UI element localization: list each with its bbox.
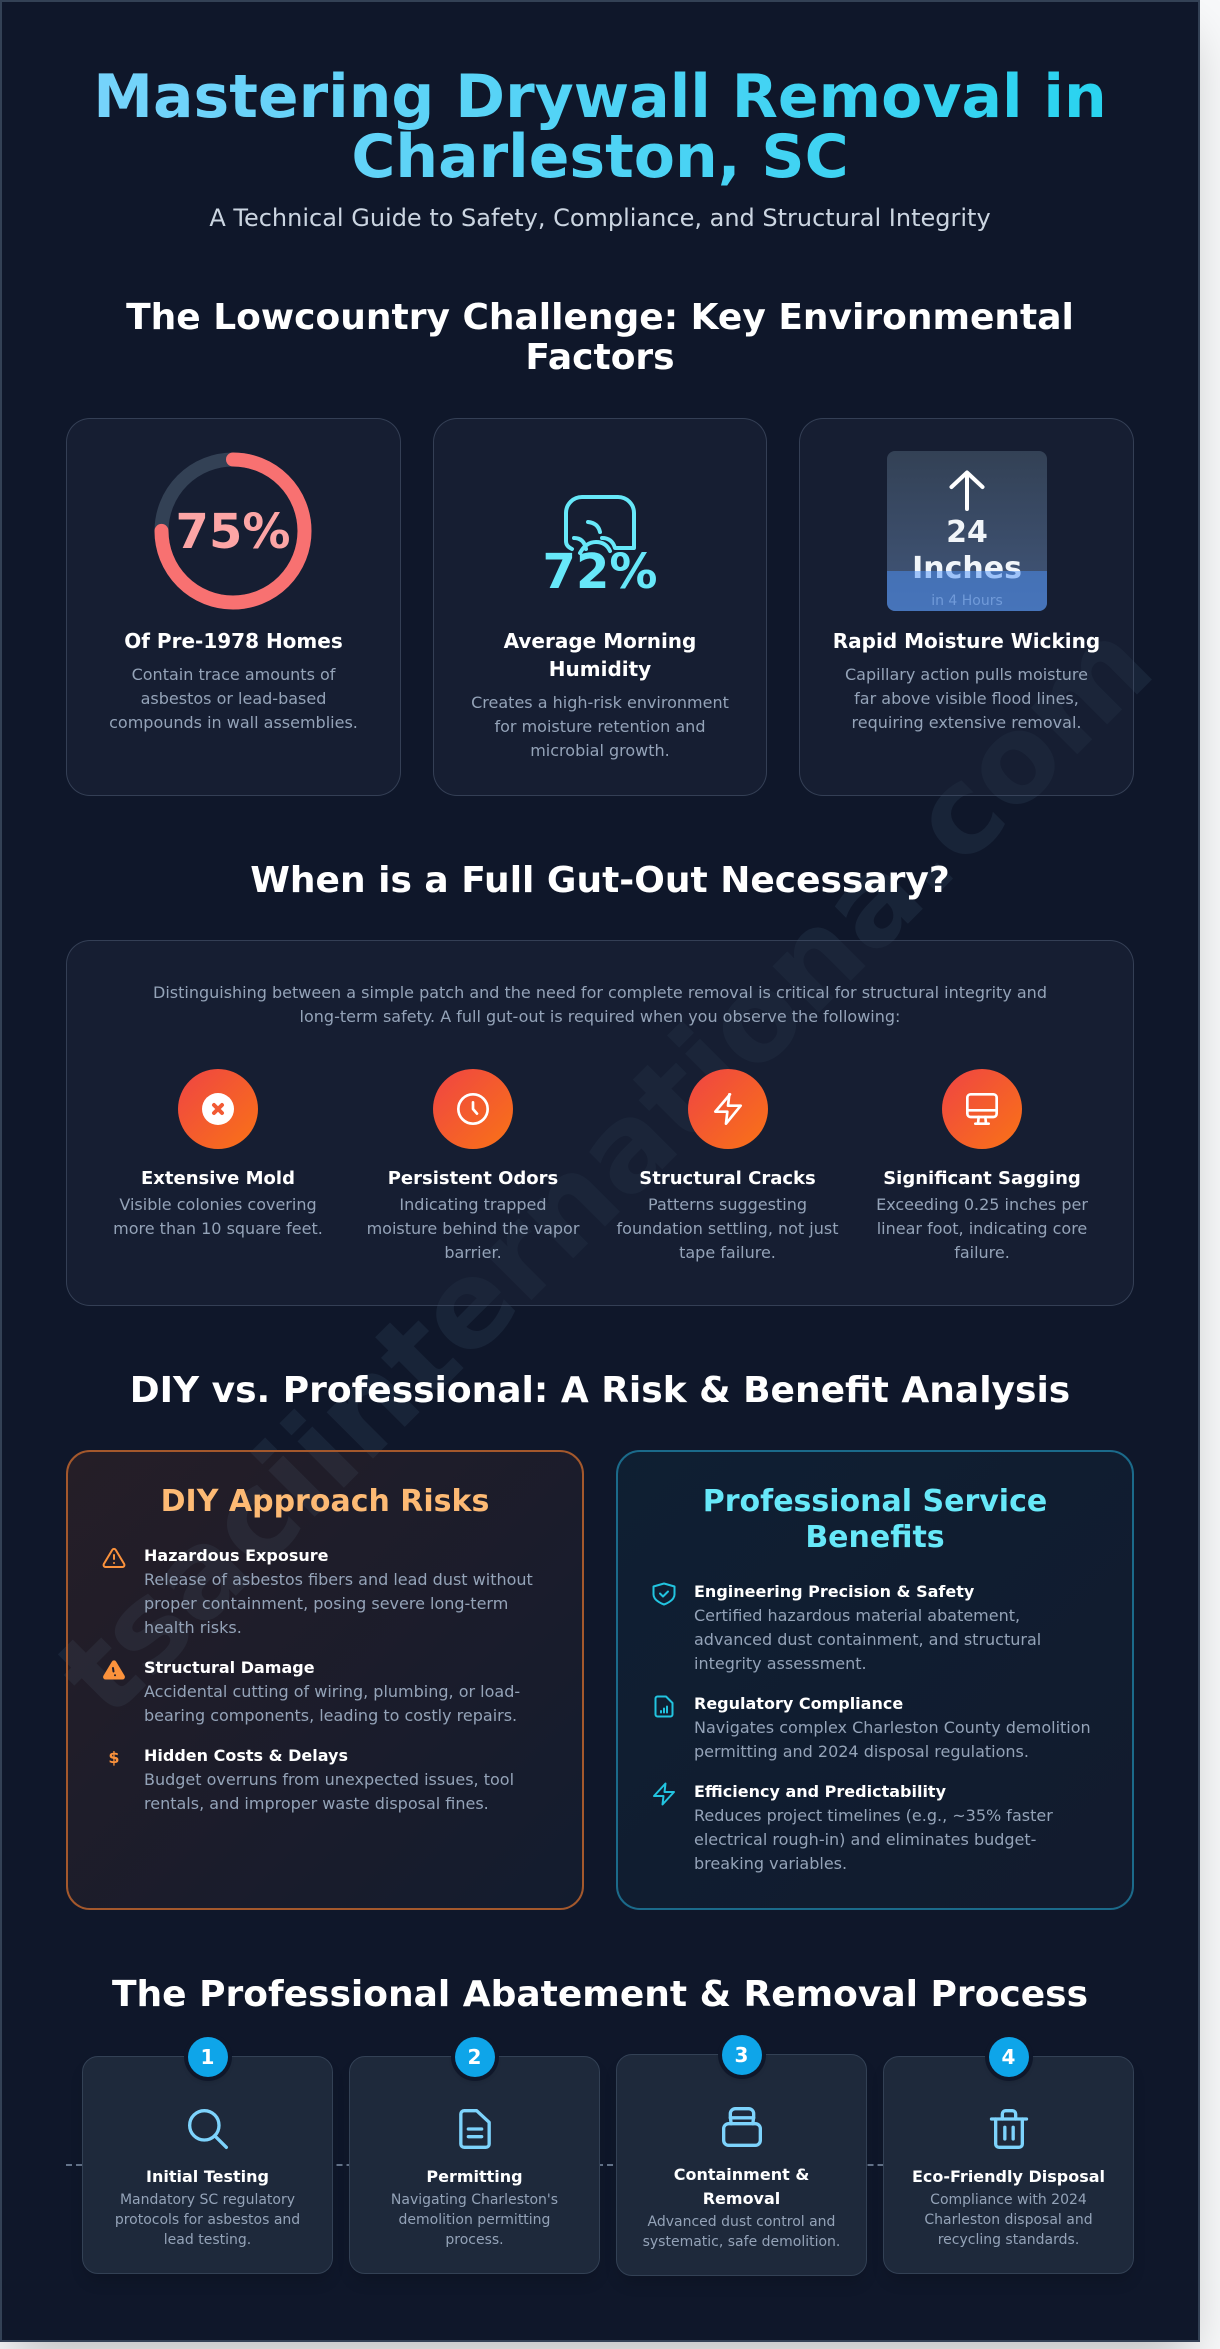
stat label: Humidity <box>549 657 651 681</box>
stat description: for moisture retention and <box>494 717 705 736</box>
step text <box>350 2190 599 2250</box>
title <box>0 67 1200 187</box>
step number: 3 <box>735 2043 748 2067</box>
sign text: Indicating trapped <box>399 1195 547 1214</box>
donut chart: 75% <box>154 452 312 610</box>
intro text: long-term safety. A full gut-out is required when you observe the following: <box>300 1007 900 1026</box>
stat description: Creates a high-risk environment <box>471 693 729 712</box>
icon: document chart <box>654 1696 674 1718</box>
subtitle: A Technical Guide to Safety, Compliance, and Structural Integrity <box>209 204 991 232</box>
sign text <box>616 1195 838 1262</box>
sign text <box>876 1195 1088 1262</box>
step number <box>722 2035 762 2075</box>
panel: gut-out signs <box>66 940 1134 1306</box>
benefit text: Reduces project timelines (e.g., ~35% faster <box>694 1806 1053 1824</box>
sign title: Persistent Odors <box>388 1168 558 1189</box>
sign title: Significant Sagging <box>883 1168 1081 1189</box>
risk text: bearing components, leading to costly repairs. <box>144 1706 517 1724</box>
sign text: moisture behind the vapor <box>367 1219 579 1238</box>
benefit: regulatory compliance <box>654 1694 1091 1760</box>
step text <box>617 2212 866 2252</box>
sign text: failure. <box>954 1243 1010 1262</box>
heading: lowcountry challenge <box>126 297 1074 378</box>
sign text <box>113 1195 323 1238</box>
sign text: linear foot, indicating core <box>877 1219 1087 1238</box>
sign text: more than 10 square feet. <box>113 1219 323 1238</box>
risk text: health risks. <box>144 1618 242 1636</box>
step text: Advanced dust control and <box>648 2214 835 2230</box>
panel: DIY risks <box>66 1450 584 1910</box>
watermark: tsaciinternationa.com <box>31 595 1179 1743</box>
risk: hidden costs <box>108 1746 514 1812</box>
icon: shield check <box>652 1582 676 1606</box>
stat label <box>504 629 696 681</box>
step text: recycling standards. <box>938 2232 1079 2248</box>
risk text: Budget overruns from unexpected issues, tool <box>144 1770 514 1788</box>
step title <box>617 2162 866 2210</box>
stat description <box>109 665 358 732</box>
stat label: Rapid Moisture Wicking <box>833 629 1100 653</box>
wicking gauge <box>887 451 1047 611</box>
risk text <box>144 1770 514 1812</box>
benefit title: Engineering Precision & Safety <box>694 1582 974 1600</box>
panel: professional benefits <box>616 1450 1134 1910</box>
benefit text: electrical rough-in) and eliminates budget- <box>694 1830 1036 1848</box>
stat label: Of Pre-1978 Homes <box>124 629 343 653</box>
step 4 <box>883 2056 1134 2274</box>
step 3 <box>616 2054 867 2276</box>
step title: Initial Testing <box>146 2166 269 2186</box>
sign text: tape failure. <box>679 1243 776 1262</box>
gauge value <box>912 515 1022 586</box>
panel heading: Professional Service <box>703 1484 1047 1519</box>
heading: abatement process: The Professional Abatement & Removal Process <box>112 1974 1088 2015</box>
stat label: Average Morning <box>504 629 696 653</box>
icon: dollar: $ <box>108 1748 120 1766</box>
sign text <box>367 1195 580 1262</box>
step title: Containment & <box>674 2164 809 2184</box>
risk text <box>144 1682 520 1724</box>
risk title: Hazardous Exposure <box>144 1546 328 1564</box>
sign text: Visible colonies covering <box>119 1195 317 1214</box>
stat description: Contain trace amounts of <box>132 665 335 684</box>
panel heading: DIY Approach Risks <box>161 1484 489 1519</box>
icon: monitor <box>942 1069 1022 1149</box>
gauge value: 24 <box>946 515 988 550</box>
risk text: Release of asbestos fibers and lead dust without <box>144 1570 533 1588</box>
connector: dashed timeline <box>66 2164 1134 2166</box>
icon: clock <box>433 1069 513 1149</box>
step number <box>988 2037 1028 2077</box>
risk: structural damage <box>103 1658 520 1724</box>
step number <box>188 2037 228 2077</box>
step text <box>115 2192 300 2248</box>
risk text: proper containment, posing severe long-term <box>144 1594 508 1612</box>
stat description <box>471 693 729 760</box>
benefit: efficiency <box>653 1782 1053 1872</box>
gauge caption: in 4 Hours <box>931 593 1003 609</box>
benefit text <box>694 1718 1091 1760</box>
step title: Removal <box>703 2188 780 2208</box>
stat description: requiring extensive removal. <box>852 713 1081 732</box>
icon: containment box <box>722 2107 762 2147</box>
benefit text: Certified hazardous material abatement, <box>694 1606 1020 1624</box>
gauge value: Inches <box>912 551 1022 586</box>
donut chart: 75%: 75% <box>176 504 290 560</box>
step number: 1 <box>201 2045 214 2069</box>
panel: stat 72 percent humidity <box>433 418 767 796</box>
step text: demolition permitting <box>399 2212 550 2228</box>
icon: search <box>188 2109 228 2150</box>
risk text: rentals, and improper waste disposal fines. <box>144 1794 489 1812</box>
step 2 <box>349 2056 600 2274</box>
icon: arrow up <box>949 470 985 511</box>
risk text: Accidental cutting of wiring, plumbing, or load- <box>144 1682 520 1700</box>
risk title: Hidden Costs & Delays <box>144 1746 348 1764</box>
stat description: far above visible flood lines, <box>854 689 1079 708</box>
panel heading <box>703 1484 1047 1555</box>
risk: hazardous exposure <box>102 1546 533 1636</box>
sign title: Extensive Mold <box>141 1168 295 1189</box>
step text: process. <box>445 2232 504 2248</box>
sign: significant sagging <box>876 1069 1088 1262</box>
benefit text: advanced dust containment, and structural <box>694 1630 1041 1648</box>
step number: 4 <box>1002 2045 1015 2069</box>
panel: stat 75 percent <box>66 418 401 796</box>
benefit text <box>694 1806 1053 1872</box>
heading: lowcountry challenge: Factors <box>525 337 675 378</box>
benefit text <box>694 1606 1041 1672</box>
benefit title: Efficiency and Predictability <box>694 1782 946 1800</box>
step number: 2 <box>468 2045 481 2069</box>
icon: warning filled <box>103 1660 125 1680</box>
water level <box>887 571 1047 611</box>
icon: humidity with 72% <box>543 495 657 600</box>
benefit: engineering precision <box>652 1582 1041 1672</box>
panel heading: Benefits <box>805 1520 945 1555</box>
benefit text: integrity assessment. <box>694 1654 867 1672</box>
risk text <box>144 1570 533 1636</box>
stat description: microbial growth. <box>530 741 670 760</box>
icon: bolt <box>688 1069 768 1149</box>
sign text: foundation settling, not just <box>617 1219 838 1238</box>
step text: Navigating Charleston's <box>391 2192 558 2208</box>
sign title: Structural Cracks <box>639 1168 816 1189</box>
step text: systematic, safe demolition. <box>643 2234 840 2250</box>
icon: warning outline <box>102 1548 126 1568</box>
title: Mastering Drywall Removal in <box>93 62 1107 132</box>
icon: document <box>459 2109 491 2149</box>
benefit text: Navigates complex Charleston County demolition <box>694 1718 1091 1736</box>
step title: Permitting <box>426 2166 523 2186</box>
stat description: compounds in wall assemblies. <box>109 713 358 732</box>
step text <box>884 2190 1133 2250</box>
step title: Eco-Friendly Disposal <box>912 2166 1105 2186</box>
stat description: asbestos or lead-based <box>141 689 326 708</box>
risk title: Structural Damage <box>144 1658 315 1676</box>
heading: DIY vs professional: DIY vs. Professional: A Risk & Benefit Analysis <box>130 1370 1070 1411</box>
step 1 <box>82 2056 333 2274</box>
stat description <box>845 665 1088 732</box>
step text: Compliance with 2024 <box>930 2192 1087 2208</box>
step text: lead testing. <box>164 2232 251 2248</box>
sign text: Patterns suggesting <box>648 1195 807 1214</box>
benefit text: permitting and 2024 disposal regulations. <box>694 1742 1029 1760</box>
panel: stat 24 inches wicking <box>799 418 1134 796</box>
stat description: Capillary action pulls moisture <box>845 665 1088 684</box>
step text: Charleston disposal and <box>924 2212 1093 2228</box>
sign text: barrier. <box>444 1243 502 1262</box>
step text: Mandatory SC regulatory <box>120 2192 295 2208</box>
sign: structural cracks <box>616 1069 838 1262</box>
title: Charleston, SC <box>351 122 849 192</box>
sign: extensive mold <box>113 1069 323 1238</box>
heading: gut-out: When is a Full Gut-Out Necessary? <box>250 860 950 900</box>
sign text: Exceeding 0.25 inches per <box>876 1195 1088 1214</box>
icon: humidity with 72%: 72% <box>543 544 657 600</box>
heading: lowcountry challenge: The Lowcountry Challenge: Key Environmental <box>126 297 1074 338</box>
benefit title: Regulatory Compliance <box>694 1694 903 1712</box>
sign: persistent odors <box>367 1069 580 1262</box>
icon: trash <box>988 2109 1028 2149</box>
intro text: Distinguishing between a simple patch and the need for complete removal is critical for structural integrity and <box>153 983 1047 1002</box>
benefit text: breaking variables. <box>694 1854 847 1872</box>
step number <box>454 2037 494 2077</box>
intro text <box>153 983 1047 1026</box>
icon: bolt <box>653 1782 675 1806</box>
step text: protocols for asbestos and <box>115 2212 300 2228</box>
icon: x circle <box>178 1069 258 1149</box>
